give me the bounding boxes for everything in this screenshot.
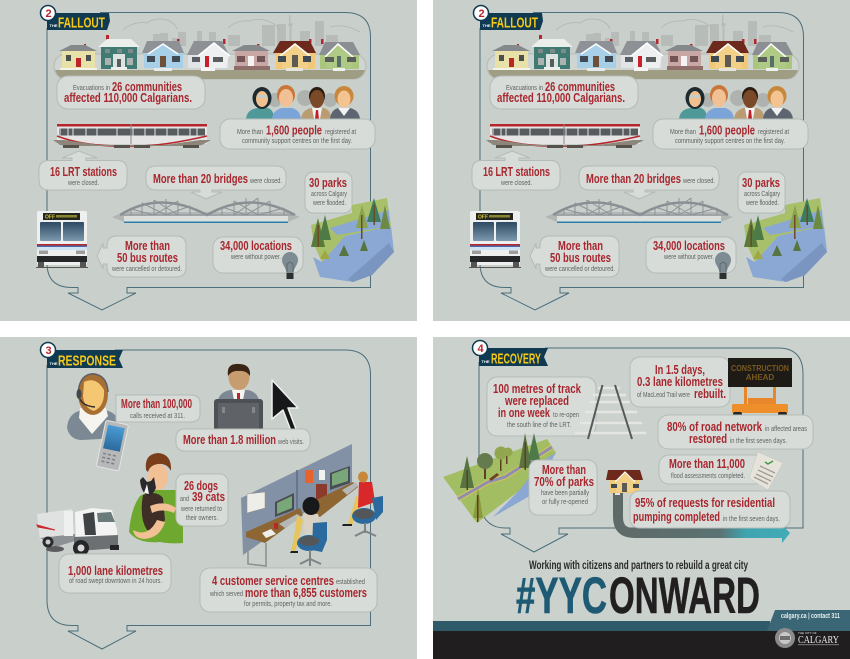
callout: 1,600 people: community support centres on the first day. xyxy=(675,138,785,145)
callout: 1.8 million web visits: More than 1.8 million xyxy=(183,432,276,447)
callout: 100 metres of track: the south line of the LRT. xyxy=(507,422,571,429)
callout: more than 11,000: flood assessments completed. xyxy=(671,473,745,480)
callout: 100 metres of track: to re-open xyxy=(553,412,579,419)
callout: 95% of requests: in the first seven days. xyxy=(723,516,780,523)
callout: 4 customer service centres: which served xyxy=(209,591,243,598)
icon: railway track xyxy=(575,385,646,439)
callout: 34,000 locations: were without power. xyxy=(663,254,714,261)
banner: the fallout: FALLOUT xyxy=(491,14,538,32)
callout: 16 LRT stations: were closed. xyxy=(67,180,99,187)
callout: more than 50 bus routes: were cancelled or detoured. xyxy=(544,266,615,273)
callout: more than 20 bridges: More than 20 bridges xyxy=(153,171,248,186)
banner: the response: RESPONSE xyxy=(58,352,116,370)
callout: 30 parks: across Calgary xyxy=(744,191,780,198)
callout: evacuations: 26 communities xyxy=(545,79,615,94)
callout: 1,600 people: 1,600 people xyxy=(699,122,755,138)
icon: city bus xyxy=(36,211,88,268)
callout: in 1.5 days xyxy=(630,357,730,407)
hashtag: #YYCONWARD: ONWARD xyxy=(609,567,760,624)
callout: 100 metres of track: in one week xyxy=(498,405,551,420)
banner: the response: 3 xyxy=(46,345,52,357)
callout: more than 50 bus routes xyxy=(530,236,619,277)
row of houses xyxy=(59,35,360,71)
callout: more than 70% of parks: 70% of parks xyxy=(534,474,594,489)
callout: evacuations: affected 110,000 Calgarians. xyxy=(64,90,192,105)
callout: 1,600 people: More than xyxy=(237,129,263,136)
callout: 16 LRT stations xyxy=(472,151,560,190)
callout: in 1.5 days: In 1.5 days, xyxy=(655,362,705,377)
callout: 34,000 locations xyxy=(213,237,303,273)
icon: city bus: OFF xyxy=(45,214,55,220)
icon: man at computer xyxy=(214,364,263,431)
icon: four people xyxy=(679,85,793,119)
callout: evacuations: Evacuations in xyxy=(506,85,543,92)
callout: 1,600 people: More than xyxy=(670,129,696,136)
icon: LRT train xyxy=(486,124,644,148)
callout: 1,600 people: registered at xyxy=(758,129,789,136)
icon: flooded park xyxy=(744,198,827,282)
banner: the fallout: FALLOUT xyxy=(58,14,105,32)
flow frame with down arrow xyxy=(480,12,804,310)
callout: 26 dogs and 39 cats: 26 dogs xyxy=(184,478,218,493)
icon: four people xyxy=(246,85,360,119)
icon: mouse cursor xyxy=(272,380,298,431)
callout: 100 metres of track xyxy=(487,377,596,436)
callout: more than 20 bridges xyxy=(579,166,719,199)
callout: 34,000 locations: 34,000 locations xyxy=(653,238,725,253)
logo: city of Calgary xyxy=(775,628,839,648)
callout: more than 50 bus routes: 50 bus routes xyxy=(550,250,611,265)
callout: 1,600 people: registered at xyxy=(325,129,356,136)
banner: the recovery: 4 xyxy=(478,343,484,355)
callout: 30 parks: were flooded. xyxy=(312,200,346,207)
callout: 1.8 million web visits: web visits. xyxy=(277,439,304,446)
footer band xyxy=(433,610,850,659)
callout: 95% of requests xyxy=(630,491,790,528)
callout: 80% of road network: in the first seven days. xyxy=(730,438,787,445)
callout: 16 LRT stations: 16 LRT stations xyxy=(50,164,117,179)
callout: more than 100,000: calls received at 311. xyxy=(130,413,185,420)
callout: 1,000 lane kilometres xyxy=(59,554,171,593)
ground strip xyxy=(487,54,799,79)
illustration: re-opened park xyxy=(443,433,556,523)
panel: the recovery xyxy=(433,337,850,659)
callout: more than 20 bridges: were closed. xyxy=(682,178,715,185)
callout: 16 LRT stations xyxy=(39,151,127,190)
icon: mobile phone xyxy=(96,420,129,471)
callout: 100 metres of track: were replaced xyxy=(504,393,569,408)
row of houses xyxy=(492,35,793,71)
callout: evacuations xyxy=(490,76,638,109)
callout: 26 dogs and 39 cats: 39 cats xyxy=(192,489,225,504)
callout: 30 parks xyxy=(738,172,785,213)
callout: 100 metres of track: 100 metres of track xyxy=(493,381,582,396)
ground strip xyxy=(54,54,366,79)
flow frame with down arrow xyxy=(47,350,370,649)
banner: the fallout xyxy=(474,6,543,32)
callout: 1,600 people xyxy=(220,119,375,149)
icon: person holding rescued dog xyxy=(129,453,183,543)
icon: call centre agent with headset xyxy=(67,373,119,440)
callout: more than 70% of parks: More than xyxy=(542,462,586,477)
callout: 4 customer service centres xyxy=(200,568,377,612)
icon: city bus xyxy=(469,211,521,268)
callout: 30 parks: 30 parks xyxy=(309,175,347,190)
skyline xyxy=(556,15,793,46)
banner: the recovery: THE xyxy=(482,359,490,364)
callout: evacuations: affected 110,000 Calgarians. xyxy=(497,90,625,105)
callout: evacuations: 26 communities xyxy=(112,79,182,94)
callout: evacuations xyxy=(57,76,205,109)
icon: house xyxy=(606,470,643,495)
callout: 30 parks: across Calgary xyxy=(311,191,347,198)
callout: 34,000 locations: 34,000 locations xyxy=(220,238,292,253)
banner: the fallout: 2 xyxy=(478,8,485,20)
flow frame with down arrow xyxy=(479,348,803,552)
callout: more than 11,000 xyxy=(659,455,765,484)
callout: 1,600 people xyxy=(653,119,808,149)
callout: 30 parks: 30 parks xyxy=(742,175,780,190)
callout: in 1.5 days: of MacLeod Trail were xyxy=(637,392,690,399)
callout: more than 100,000: More than 100,000 xyxy=(121,396,192,411)
callout: 34,000 locations: were without power. xyxy=(230,254,281,261)
icon: city bus: OFF xyxy=(478,214,488,220)
skyline xyxy=(123,15,360,46)
callout: 26 dogs and 39 cats: were returned to xyxy=(180,506,222,513)
panel: the fallout (repeat) xyxy=(433,0,850,321)
callout: 4 customer service centres: more than 6,855 customers xyxy=(245,585,367,600)
callout: 16 LRT stations: were closed. xyxy=(500,180,532,187)
callout: more than 70% of parks: have been partially xyxy=(541,490,589,497)
icon: pumping pipe with arrow xyxy=(618,490,790,543)
panel: the fallout xyxy=(0,0,417,321)
flow frame with down arrow xyxy=(47,12,370,310)
callout: in 1.5 days: 0.3 lane kilometres xyxy=(637,374,723,389)
callout: more than 70% of parks: or fully re-opened xyxy=(542,499,588,506)
illustration: customer service cubicles xyxy=(241,444,383,566)
icon: construction sign trailer xyxy=(728,358,792,419)
panel: the response xyxy=(0,337,417,659)
logo: city of Calgary: CALGARY xyxy=(798,635,839,646)
icon: street sweeper truck xyxy=(37,508,119,556)
banner: the recovery: RECOVERY xyxy=(491,350,541,368)
callout: 4 customer service centres: established xyxy=(336,579,365,586)
callout: more than 20 bridges: were closed. xyxy=(249,178,282,185)
callout: 26 dogs and 39 cats: and xyxy=(180,496,189,503)
banner: the fallout xyxy=(40,6,110,32)
icon: light bulb xyxy=(282,252,298,279)
icon: checked document xyxy=(749,452,783,490)
callout: 80% of road network: restored xyxy=(689,431,727,446)
callout: evacuations: Evacuations in xyxy=(73,85,110,92)
callout: 16 LRT stations: 16 LRT stations xyxy=(483,164,550,179)
banner: the fallout: THE xyxy=(482,23,491,28)
hashtag: #YYCONWARD: #YYC xyxy=(516,567,607,624)
callout: more than 70% of parks xyxy=(529,460,597,515)
callout: more than 11,000: More than 11,000 xyxy=(669,456,745,471)
callout: 34,000 locations xyxy=(646,237,736,273)
callout: 26 dogs and 39 cats xyxy=(176,474,228,526)
callout: 30 parks: were flooded. xyxy=(745,200,779,207)
callout: more than 50 bus routes: More than xyxy=(558,238,603,253)
callout: more than 100,000 xyxy=(116,395,200,422)
callout: 1,600 people: community support centres on the first day. xyxy=(242,138,352,145)
banner: the fallout: THE xyxy=(50,23,58,28)
callout: 1,600 people: 1,600 people xyxy=(266,122,322,138)
banner: the recovery xyxy=(472,340,548,368)
tagline: Working with citizens and partners to rebuild a great city xyxy=(529,558,748,572)
callout: more than 20 bridges xyxy=(146,166,286,199)
callout: 1,000 lane kilometres: 1,000 lane kilometres xyxy=(68,563,163,578)
icon: light bulb xyxy=(715,252,731,279)
callout: 26 dogs and 39 cats: their owners. xyxy=(186,515,218,522)
callout: 1.8 million web visits xyxy=(176,429,310,451)
callout: 80% of road network: in affected areas xyxy=(765,426,807,433)
callout: 80% of road network xyxy=(658,415,813,449)
icon: flooded park xyxy=(311,198,394,282)
logo: city of Calgary: THE CITY OF xyxy=(798,631,817,635)
callout: more than 50 bus routes: were cancelled or detoured. xyxy=(111,266,182,273)
hashtag: #YYCONWARD xyxy=(516,567,760,624)
icon: truss bridge xyxy=(112,198,300,223)
callout: in 1.5 days: rebuilt. xyxy=(694,386,726,401)
callout: 4 customer service centres: for permits, property tax and more. xyxy=(244,601,332,608)
icon: construction sign trailer: AHEAD xyxy=(746,373,774,382)
banner: the response: THE xyxy=(50,361,58,366)
callout: more than 50 bus routes: More than xyxy=(125,238,170,253)
callout: 4 customer service centres: 4 customer service centres xyxy=(212,573,334,588)
callout: more than 20 bridges: More than 20 bridges xyxy=(586,171,681,186)
callout: more than 50 bus routes xyxy=(97,236,186,277)
icon: LRT train xyxy=(53,124,211,148)
callout: 80% of road network: 80% of road network xyxy=(667,419,763,434)
icon: truss bridge xyxy=(545,198,733,223)
icon: construction sign trailer: CONSTRUCTION xyxy=(731,364,789,373)
callout: 95% of requests: 95% of requests for residential xyxy=(635,495,775,510)
callout: 1,000 lane kilometres: of road swept downtown in 24 hours. xyxy=(69,578,162,585)
callout: 30 parks xyxy=(305,172,352,213)
callout: more than 50 bus routes: 50 bus routes xyxy=(117,250,178,265)
banner: the response xyxy=(40,342,123,370)
banner: the fallout: 2 xyxy=(46,8,52,20)
callout: 95% of requests: pumping completed xyxy=(633,509,720,524)
